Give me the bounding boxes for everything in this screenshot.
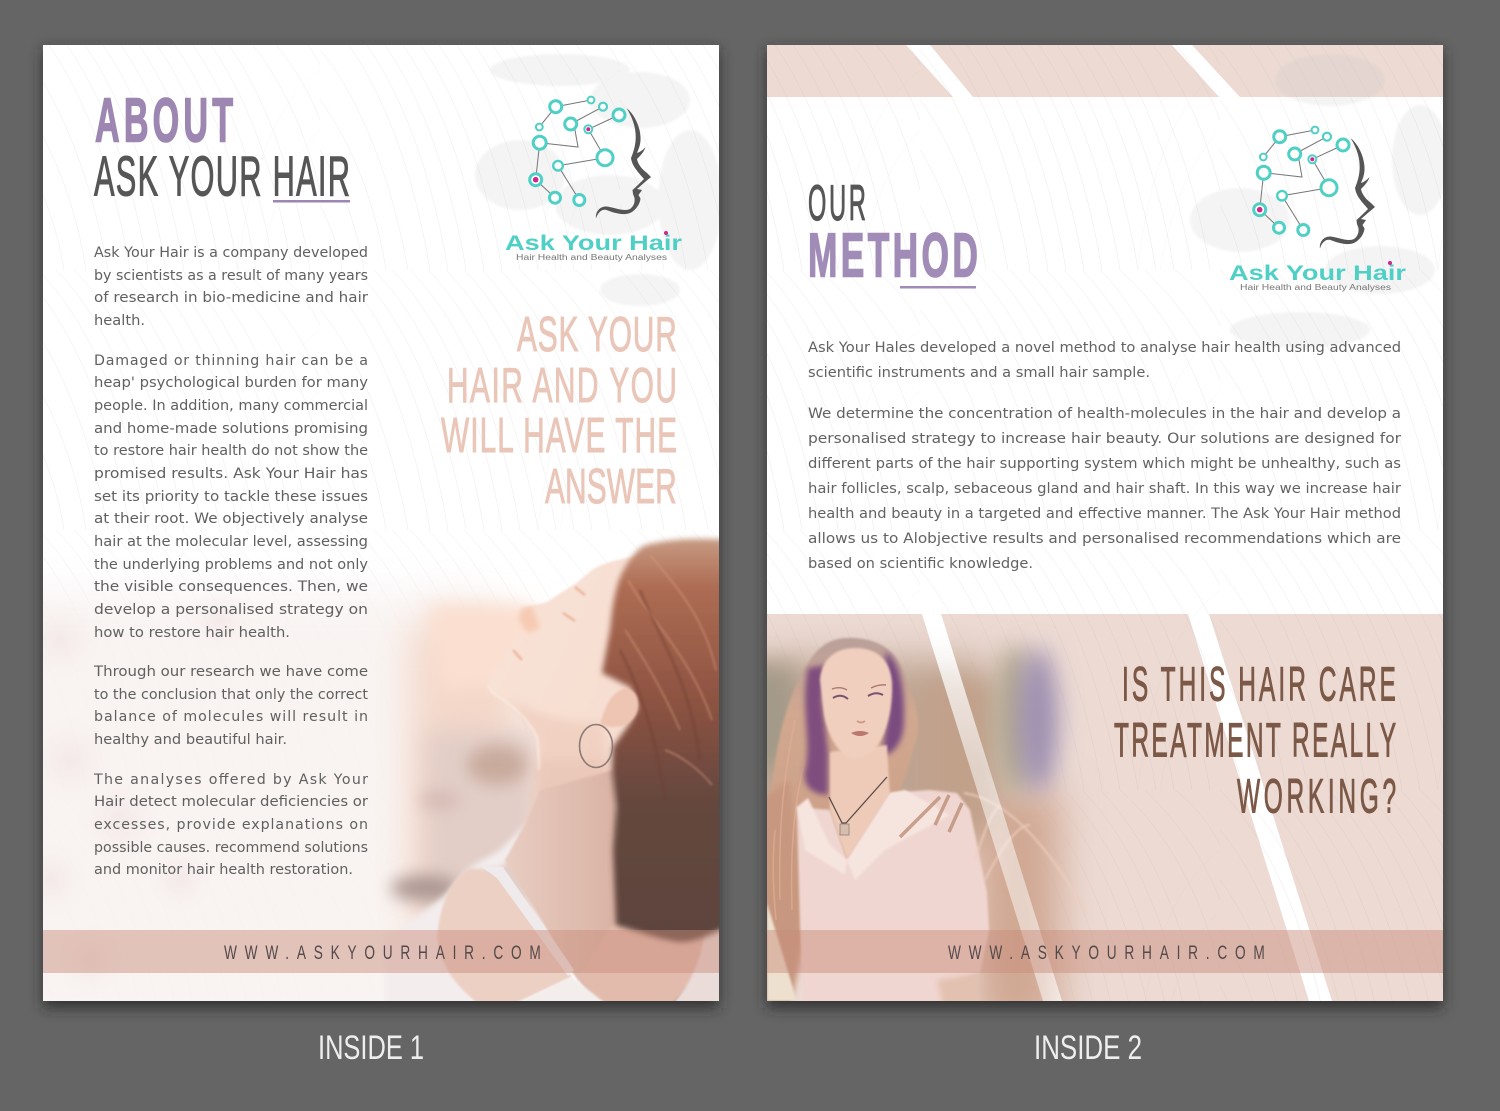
text block: method copy: based on scientific knowledge. bbox=[808, 556, 1033, 572]
panel: inside page 1 bbox=[0, 45, 730, 1040]
shirt bbox=[797, 790, 989, 1010]
heading: about ask your hair: ASK YOUR HAIR bbox=[94, 144, 350, 208]
footer band bbox=[767, 930, 1443, 973]
face and neck bbox=[497, 556, 640, 814]
text block: method copy: personalised strategy to increase hair beauty. Our solutions are designed for bbox=[808, 431, 1401, 447]
neck bbox=[830, 745, 890, 860]
text block: about copy: at their root. We objectively analyse bbox=[94, 511, 368, 527]
long hair bbox=[772, 637, 918, 906]
heading: our method bbox=[808, 176, 978, 290]
photo background haze bbox=[391, 606, 540, 930]
text block: method copy: Ask Your Hales developed a novel method to analyse hair health using advanced bbox=[808, 340, 1401, 356]
face bbox=[820, 648, 892, 758]
shoulder skin bbox=[437, 869, 572, 1003]
callout: is this hair care treatment really working: IS THIS HAIR CARE bbox=[1122, 659, 1396, 712]
panel: inside page 2 bbox=[740, 45, 1448, 1030]
tagline: ask your hair and you: ANSWER bbox=[545, 458, 677, 514]
text block: about copy: possible causes. recommend solutions bbox=[94, 840, 368, 856]
text block: about copy: The analyses offered by Ask Your bbox=[93, 772, 368, 788]
text block: method copy: We determine the concentration of health-molecules in the hair and develop a bbox=[808, 406, 1401, 422]
text block: about copy: heap' psychological burden for many bbox=[94, 375, 368, 391]
diagonal stripe over photo bbox=[922, 614, 1062, 1001]
dress strap bbox=[480, 866, 574, 976]
text block: method copy: different parts of the hair supporting system which might be unhealthy, such as bbox=[808, 456, 1401, 472]
text block: about copy: Hair detect molecular deficiencies or bbox=[94, 794, 368, 810]
text block: about copy: and home-made solutions promising bbox=[94, 421, 368, 437]
photo background blur bbox=[740, 645, 1060, 1030]
text block: method copy: scientific instruments and a small hair sample. bbox=[808, 365, 1150, 381]
text block: about copy: people. In addition, many commercial bbox=[94, 398, 368, 414]
text block: about copy: by scientists as a result of many years bbox=[94, 268, 368, 284]
photo: woman looking up bbox=[385, 539, 730, 1015]
icon: ask your hair logo: Hair Health and Beauty Analyses bbox=[1240, 283, 1391, 292]
tagline: ask your hair and you: ASK YOUR bbox=[517, 306, 677, 362]
text block: about copy: Damaged or thinning hair can be a bbox=[94, 353, 368, 369]
website url: WWW.ASKYOURHAIR.COM bbox=[948, 942, 1265, 964]
collar bbox=[797, 790, 950, 880]
text block: about copy: health. bbox=[94, 313, 145, 329]
text block: about copy: balance of molecules will result in bbox=[94, 709, 368, 725]
wheat stems bbox=[900, 795, 962, 837]
callout: is this hair care treatment really working: TREATMENT REALLY bbox=[1114, 715, 1396, 768]
text block: method copy bbox=[808, 340, 1401, 572]
icon: ask your hair logo: Ask Your Hair bbox=[1229, 262, 1406, 285]
footer band bbox=[43, 930, 719, 973]
text block: about copy: develop a personalised strategy on bbox=[94, 602, 368, 618]
text block: about copy: the underlying problems and not only bbox=[94, 557, 368, 573]
text block: about copy: to restore hair health do not show the bbox=[94, 443, 368, 459]
top colour band bbox=[767, 45, 1443, 97]
text block: about copy: promised results. Ask Your Hair has bbox=[94, 466, 368, 482]
hair bbox=[602, 539, 730, 942]
text block: about copy: and monitor hair health restoration. bbox=[94, 862, 353, 878]
caption: inside 1: INSIDE 1 bbox=[318, 1029, 424, 1067]
icon: ask your hair logo: Ask Your Hair bbox=[505, 232, 682, 255]
tagline: ask your hair and you bbox=[441, 306, 677, 514]
caption: inside 2: INSIDE 2 bbox=[1034, 1029, 1142, 1067]
ear bbox=[600, 688, 638, 727]
text block: about copy: Through our research we have come bbox=[93, 664, 368, 680]
text block: about copy: how to restore hair health. bbox=[94, 625, 290, 641]
bottom left light hair bbox=[767, 903, 797, 1001]
heading: our method: OUR bbox=[808, 176, 866, 232]
tagline: ask your hair and you: HAIR AND YOU bbox=[447, 357, 677, 413]
shoulder cloth bbox=[412, 824, 524, 1001]
bottom colour band bbox=[767, 614, 1443, 1001]
heading: about ask your hair: ABOUT bbox=[95, 86, 233, 155]
right back skin bbox=[618, 930, 704, 1001]
icon: ask your hair logo: Hair Health and Beauty Analyses bbox=[516, 253, 667, 262]
text block: about copy: set its priority to tackle these issues bbox=[94, 489, 368, 505]
callout: is this hair care treatment really working bbox=[1114, 659, 1396, 824]
text block: about copy: to the conclusion that only the correct bbox=[94, 687, 368, 703]
text block: about copy: of research in bio-medicine and hair bbox=[94, 290, 368, 306]
heading: our method: METHOD bbox=[808, 220, 978, 290]
text block: about copy: hair at the molecular level, assessing bbox=[94, 534, 368, 550]
necklace bbox=[829, 777, 887, 823]
heading: about ask your hair bbox=[94, 86, 350, 208]
icon: ask your hair logo bbox=[505, 97, 682, 262]
purple hair strands bbox=[804, 665, 828, 795]
text block: method copy: health and beauty in a targeted and effective manner. The Ask Your Hair method bbox=[808, 506, 1401, 522]
photo: woman with long hair bbox=[767, 634, 1088, 1001]
website url: WWW.ASKYOURHAIR.COM bbox=[224, 942, 541, 964]
text block: method copy: allows us to Alobjective results and personalised recommendations which are bbox=[808, 531, 1401, 547]
tagline: ask your hair and you: WILL HAVE THE bbox=[441, 407, 677, 463]
text block: about copy: healthy and beautiful hair. bbox=[94, 732, 287, 748]
icon: ask your hair logo bbox=[1229, 127, 1406, 292]
text block: about copy bbox=[93, 245, 368, 878]
callout: is this hair care treatment really working: WORKING? bbox=[1237, 771, 1396, 824]
back skin bbox=[504, 770, 692, 1001]
text block: about copy: excesses, provide explanations on bbox=[94, 817, 368, 833]
earring bbox=[580, 724, 612, 768]
text block: about copy: the visible consequences. Then, we bbox=[94, 579, 368, 595]
text block: about copy: Ask Your Hair is a company developed bbox=[94, 245, 368, 261]
text block: method copy: hair follicles, scalp, sebaceous gland and hair shaft. In this way we increase hair bbox=[808, 481, 1401, 497]
